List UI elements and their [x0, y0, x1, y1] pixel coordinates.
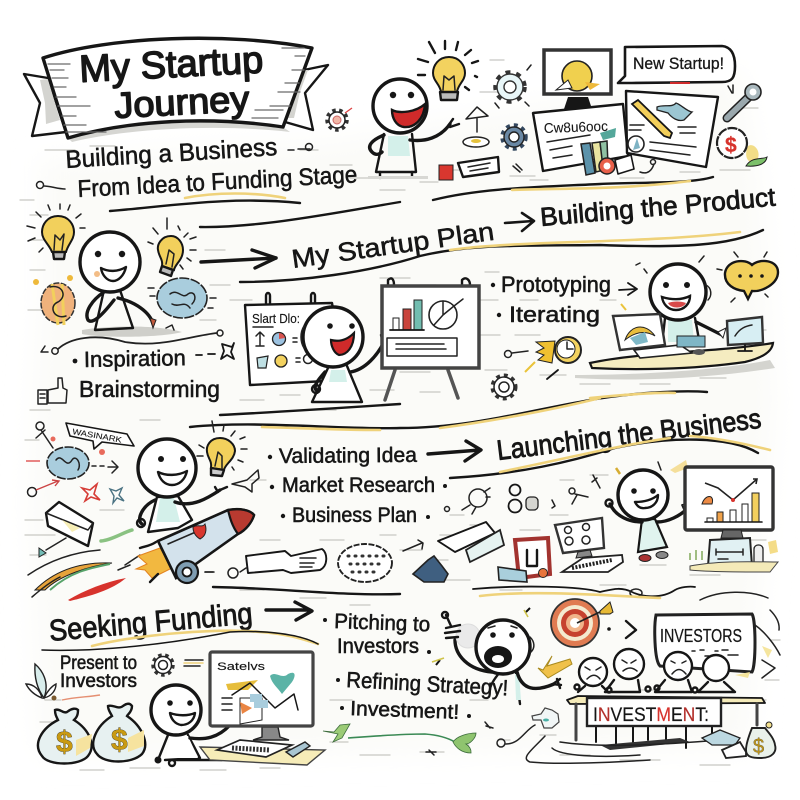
money bags: [38, 704, 145, 764]
table: [567, 696, 765, 704]
icon: gear funding: [153, 655, 203, 675]
character: presenter top: [368, 79, 459, 179]
text: investment: Investment!: [350, 697, 460, 724]
icon: brain diagram with sign: WASINARK: [72, 427, 123, 445]
text: present to investors: Investors: [60, 671, 137, 692]
icon: envelope: [439, 157, 522, 180]
monitor with avatar: [544, 50, 611, 109]
icon: target: [551, 599, 636, 647]
character at desk: [575, 264, 775, 380]
heading: seeking funding: Seeking Funding: [48, 597, 254, 648]
text: brainstorming: Brainstorming: [79, 376, 220, 402]
banner title: [24, 38, 328, 142]
icon: stars: [82, 470, 259, 503]
speech bubble: new startup: New Startup!: [633, 54, 724, 73]
keyboard: [634, 345, 692, 358]
icon: dollar bubble: [717, 128, 767, 166]
icon: small computer: [555, 518, 623, 572]
icon: gear light blue: [495, 65, 531, 108]
connector: gear and loop: [426, 708, 650, 763]
icon: light bulb top: [418, 41, 478, 100]
text: iterating: Iterating: [509, 302, 600, 327]
text: pitching to investors: Investors: [337, 635, 419, 658]
rocket wheel: [176, 561, 198, 583]
desk monitor right: [727, 317, 763, 345]
banner title: Journey: [113, 78, 250, 126]
monitor with growth chart: [685, 467, 773, 538]
divider strokes top: [110, 177, 713, 227]
funding monitor: [200, 652, 325, 765]
desk monitor left: [613, 314, 665, 350]
money bags: $: [56, 726, 73, 759]
text: refining strategy: Refining Strategy!: [346, 667, 509, 700]
divider launch: [450, 436, 770, 478]
icons: tube and dotted cloud: [205, 544, 392, 582]
icon: bulb left: [27, 204, 85, 259]
connector curve: [41, 330, 234, 359]
document left: [533, 104, 628, 171]
whiteboard start do: Slart Dlo:: [252, 312, 300, 326]
document right: [626, 91, 718, 167]
icon: money bag right with papers: $: [753, 736, 764, 758]
text: prototyping: Prototyping: [501, 272, 611, 297]
icon: check and arrow: [432, 608, 572, 678]
plant stem and leaves: [323, 724, 476, 753]
investors board: [655, 610, 780, 678]
icon: stacked folders: [438, 522, 504, 562]
easel chart board: [382, 278, 479, 400]
icon: blue brain cloud: [148, 278, 216, 330]
whiteboard start do: [245, 293, 345, 385]
character on rocket: [28, 439, 254, 601]
printer: [690, 538, 778, 572]
icon: dollar bubble: $: [725, 134, 737, 157]
subtitle: [36, 133, 358, 203]
investment banner: [587, 698, 721, 726]
icon: wrench: [727, 84, 761, 118]
subtitle: Building a Business: [65, 133, 278, 174]
desk: [590, 343, 773, 369]
heading: launching the business: Launching the Business: [495, 403, 763, 466]
books and tools: [581, 128, 656, 175]
icon: blue bag: [413, 556, 448, 582]
heading: my startup plan: [201, 216, 496, 274]
icon: chat bubble heart: [621, 252, 778, 310]
small doodles mid: [403, 475, 600, 551]
icon: brain diagram with sign: [26, 422, 134, 496]
character: launching: [606, 460, 702, 562]
subtitle: From Idea to Funding Stage: [77, 161, 358, 203]
text: pitching to investors: [323, 610, 431, 658]
investors panel table: [560, 649, 765, 750]
list: validating market business: Business Plan: [292, 504, 417, 527]
speed streaks: [35, 563, 112, 590]
heading: launching the business: [428, 403, 763, 466]
text: inspiration: Inspiration: [84, 345, 186, 372]
flame: [136, 548, 172, 578]
speech bubble: new startup: [618, 46, 735, 83]
banner main ribbon: [43, 38, 312, 138]
paper plane: [657, 103, 692, 121]
character: pitching: [442, 612, 561, 704]
heading: building the product: Building the Product: [539, 181, 777, 232]
divider section two: [190, 391, 707, 430]
investor heads: [574, 649, 735, 692]
character: board presenter: [301, 307, 391, 402]
icon: bulb right: [148, 218, 196, 276]
rocket body: [158, 509, 254, 578]
character: inspiration: [80, 232, 182, 337]
divider under headings: [240, 230, 763, 282]
pencil: [632, 100, 672, 138]
icon: orange brain with dollar: [33, 275, 75, 325]
icon: box: [39, 502, 93, 557]
icon: red frame and box: [498, 538, 550, 582]
funding monitor: Satelvs: [217, 661, 266, 673]
title text: My Startup: [78, 39, 264, 91]
investors board: INVESTORS: [660, 626, 742, 646]
money bags: $: [111, 724, 128, 757]
wavy divider lower: [213, 587, 768, 600]
list: validating market business: [268, 444, 447, 527]
document left: Cw8u6ooc: [544, 118, 608, 136]
text: present to investors: Present to: [60, 653, 137, 674]
arrow between headings: [505, 213, 534, 231]
icon: clock with wing: [504, 337, 581, 379]
icon: gear bottom: [492, 375, 516, 399]
icon: gear small top: [327, 108, 352, 130]
text: present to investors: [60, 653, 137, 692]
list: validating market business: Validating Idea: [279, 444, 417, 468]
text: pitching to investors: Pitching to: [334, 610, 431, 636]
character: monitor presenter: [151, 685, 232, 766]
character body: [148, 496, 192, 532]
banner left tail: [24, 74, 66, 136]
icon: map pin and oval: [463, 107, 489, 147]
icon: bulb mid: [197, 421, 247, 476]
icon: gear blue: [502, 125, 526, 149]
heading: my startup plan: My Startup Plan: [290, 216, 496, 274]
investors panel table: INVESTMENT:: [593, 705, 709, 726]
green stroke: [101, 530, 132, 541]
list: validating market business: Market Research: [282, 474, 435, 497]
icon: plant: [26, 664, 100, 700]
banner right tail: [285, 65, 328, 130]
icon: money bag right with papers: [702, 722, 775, 758]
